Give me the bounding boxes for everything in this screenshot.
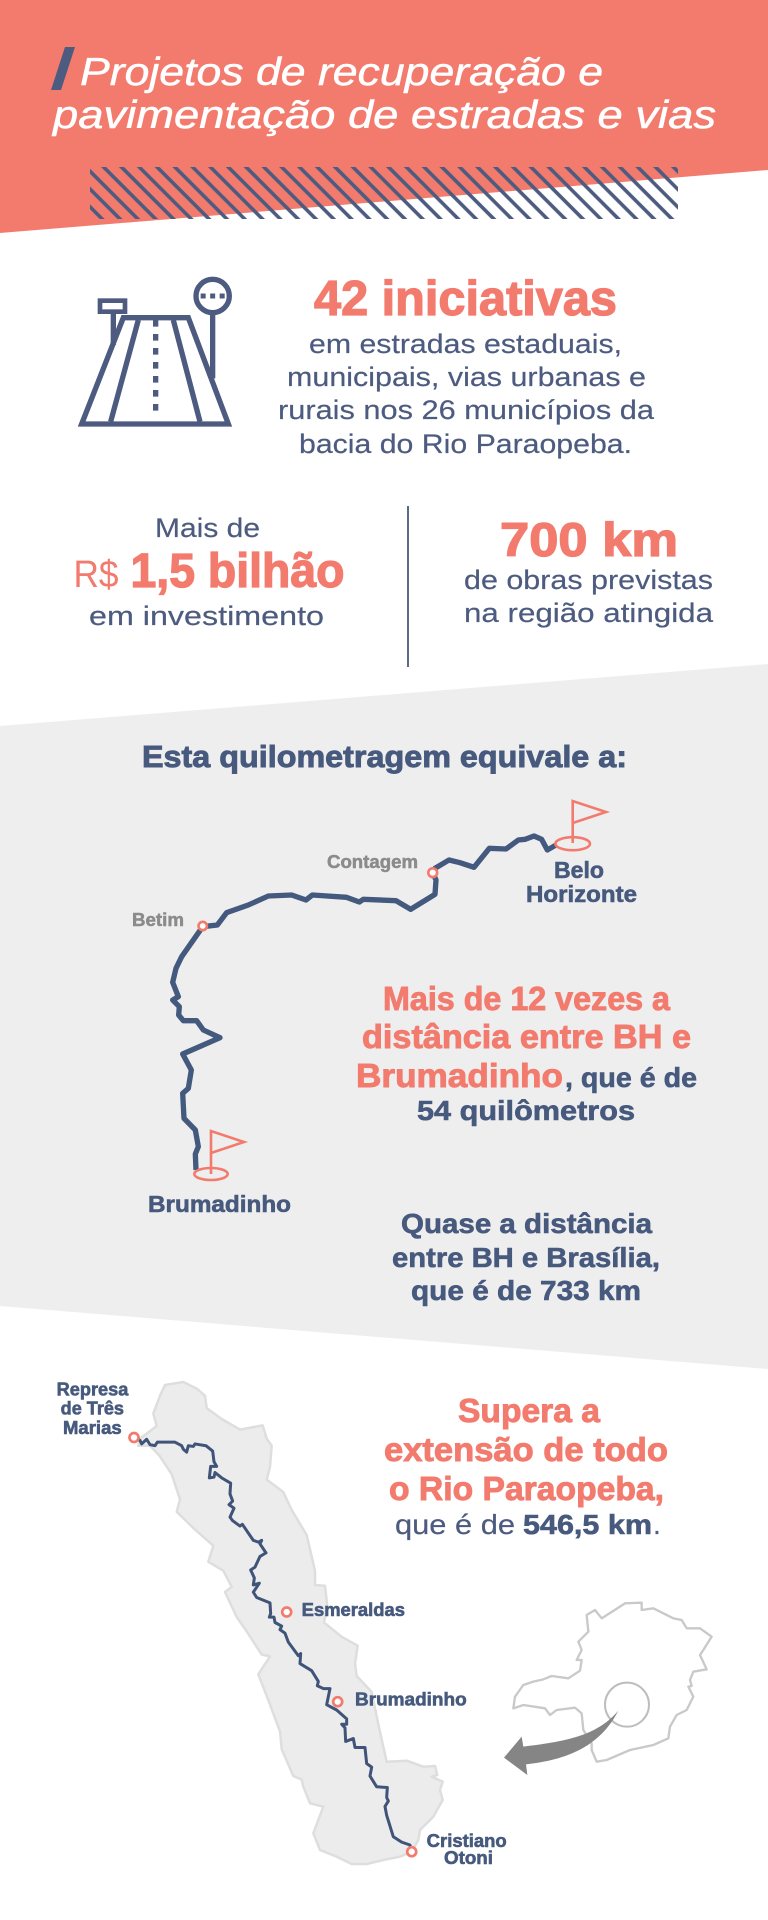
text block: 42 iniciativas [278,272,655,459]
arrow [504,1711,618,1775]
callout: 12 times the distance: , que é de [565,1062,697,1093]
stat label top: Mais de [155,513,260,543]
label: Represa de Três Marias: Marias [63,1418,122,1438]
callout: Rio Paraopeba length: . [653,1509,661,1540]
callout: 12 times the distance: Brumadinho [356,1057,563,1094]
label: Cristiano Otoni: Otoni [444,1848,493,1868]
basin shape [138,1382,443,1864]
description line 1: em estradas estaduais, [309,329,622,359]
heading: 42 iniciativas [314,272,617,326]
title line 2: pavimentação de estradas e vias [52,94,716,137]
label: Belo Horizonte: Belo [554,857,604,883]
title accent bar [51,47,75,90]
callout: 12 times the distance: distância entre BH e [362,1018,691,1055]
label: Cristiano Otoni: Cristiano [427,1831,507,1851]
panel: header banner [0,0,768,233]
callout: Rio Paraopeba length: que é de [395,1509,515,1540]
description line 4: bacia do Rio Paraopeba. [299,429,632,459]
label: Brumadinho: Brumadinho [355,1690,467,1710]
marker: Betim [198,922,207,930]
label: Brumadinho: Brumadinho [148,1191,291,1217]
marker: Cristiano Otoni [407,1847,416,1856]
callout: 12 times the distance [356,980,697,1126]
marker: Contagem [428,868,437,877]
stat label line 1: de obras previstas [464,565,713,595]
label: Represa de Três Marias: Represa [57,1380,129,1400]
label: Belo Horizonte: Horizonte [526,881,637,907]
description line 2: municipais, vias urbanas e [287,362,646,392]
stat: investment [74,513,344,631]
flag: Belo Horizonte [555,801,606,850]
map: Paraopeba river basin [57,1380,507,1868]
title [51,47,716,137]
panel: grey equivalence section [0,664,768,1369]
flag: Brumadinho [194,1131,244,1180]
callout: BH to Brasília: que é de 733 km [411,1275,641,1306]
stat: 700 km [464,513,714,628]
callout: Rio Paraopeba length: o Rio Paraopeba, [389,1470,664,1507]
label: Represa de Três Marias: de Três [61,1399,124,1419]
stat value: 700 km [500,513,678,566]
marker: Brumadinho [333,1697,342,1706]
callout: 12 times the distance: 54 quilômetros [417,1095,635,1126]
stat label bottom: em investimento [89,601,324,631]
callout: BH to Brasília: entre BH e Brasília, [392,1242,660,1273]
stat value: 1,5 bilhão [130,545,344,598]
marker: Esmeraldas [282,1608,291,1616]
callout: Rio Paraopeba length: extensão de todo [384,1431,668,1468]
title line 1: Projetos de recuperação e [80,51,603,94]
label: Esmeraldas: Esmeraldas [302,1600,405,1620]
marker: Três Marias [130,1433,138,1442]
callout: Rio Paraopeba length: Supera a [458,1392,601,1429]
currency: R$ [74,554,118,596]
callout: BH to Brasília [392,1208,660,1306]
callout: 12 times the distance: Mais de 12 vezes a [383,980,671,1017]
hatch stripes [90,167,678,219]
description line 3: rurais nos 26 municípios da [278,395,655,425]
callout: Rio Paraopeba length: 546,5 km [523,1509,652,1540]
callout: Rio Paraopeba length [384,1392,668,1540]
icon: road with signs [82,279,229,424]
river line [134,1437,412,1852]
divider [407,506,409,667]
label: Betim: Betim [132,910,184,930]
label: Cristiano Otoni [427,1831,507,1868]
label: Contagem: Contagem [327,852,418,872]
region circle [605,1683,649,1727]
state outline [513,1603,712,1762]
callout: BH to Brasília: Quase a distância [401,1208,652,1239]
route map: BH to Brumadinho [132,801,637,1217]
label: Belo Horizonte [526,857,637,907]
section heading: Esta quilometragem equivale a: [142,739,627,774]
map: Minas Gerais locator [504,1603,712,1775]
label: Represa de Três Marias [57,1380,129,1438]
stat label line 2: na região atingida [464,598,714,628]
route line [173,836,556,1170]
